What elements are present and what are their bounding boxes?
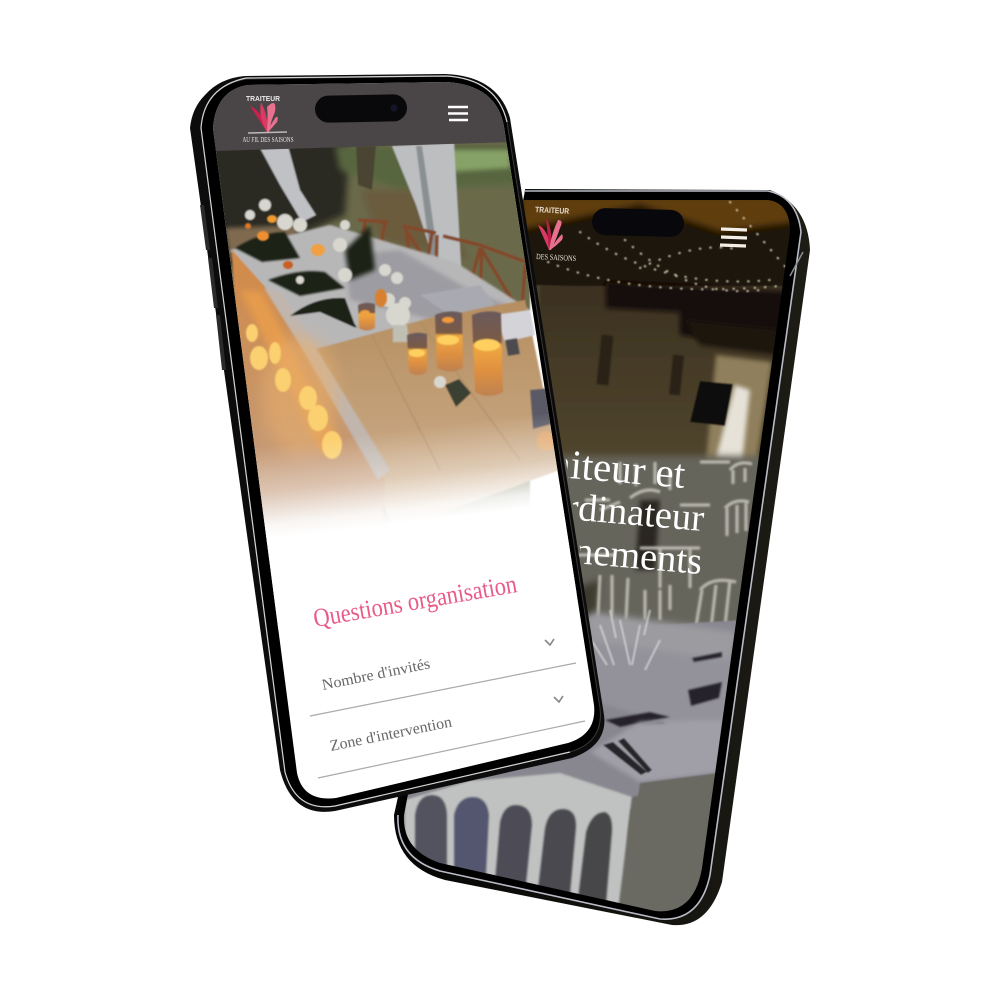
wood tabletop [312,300,560,530]
back photo: barn reception room [404,200,790,912]
chairs [358,220,526,310]
front phone camera island [315,94,407,123]
front phone logo [242,94,294,144]
mockup scene: two phones [190,74,810,926]
logo wordmark bottom: DES SAISONS [536,252,576,263]
front phone menu icon [448,107,468,120]
row 1 label: Nombre d'invités [320,655,432,694]
front phone body [190,74,604,812]
photo fade to white [256,418,577,630]
FAQ row 2 [318,696,585,778]
FAQ row 1 [310,639,576,716]
headline line 3: d'événements [493,523,704,583]
floor candles [246,324,342,459]
back phone menu icon [720,229,747,246]
chair back arches [415,795,612,905]
front phone metal frame [201,76,600,807]
front phone [190,70,610,812]
back phone screen [404,200,790,912]
front phone screen [213,82,594,798]
front phone side buttons [200,205,226,370]
row 2 label: Zone d'intervention [328,713,454,755]
back phone metal frame [398,191,801,919]
white tablecloth [230,225,530,362]
back phone [390,189,810,930]
string lights [548,202,790,291]
logo pink leaves [538,218,563,250]
back phone logo [535,205,576,263]
front phone silver edge highlight [201,76,570,807]
floor candle glow [240,290,338,455]
logo pink leaves [250,102,278,132]
background chairs [575,462,752,638]
logo wordmark top: TRAITEUR [246,94,281,103]
floor with glow [232,250,385,560]
greenery [235,225,375,328]
back phone camera island [592,208,684,237]
logo wordmark bottom: AU FIL DES SAISONS [242,135,294,144]
front phone header bar [213,82,506,151]
headline line 2: coordinateur [508,481,706,540]
back phone body [394,189,810,925]
row 2 chevron [554,696,563,702]
table candles [245,215,503,396]
back phone headline [566,451,704,574]
candle small back [358,303,375,330]
candle middle tall [435,311,463,372]
row 1 chevron [545,639,554,645]
white flowers [245,199,446,388]
candle large right [472,311,503,396]
front photo: candlelit table in tent [200,140,560,560]
candle small [407,333,427,375]
place settings [422,286,494,313]
logo wordmark top: TRAITEUR [535,205,570,216]
white table runner edge [264,288,390,480]
headline line 1: Traiteur et [513,436,688,497]
section heading: Questions organisation [311,569,519,633]
back phone side button [790,252,803,276]
